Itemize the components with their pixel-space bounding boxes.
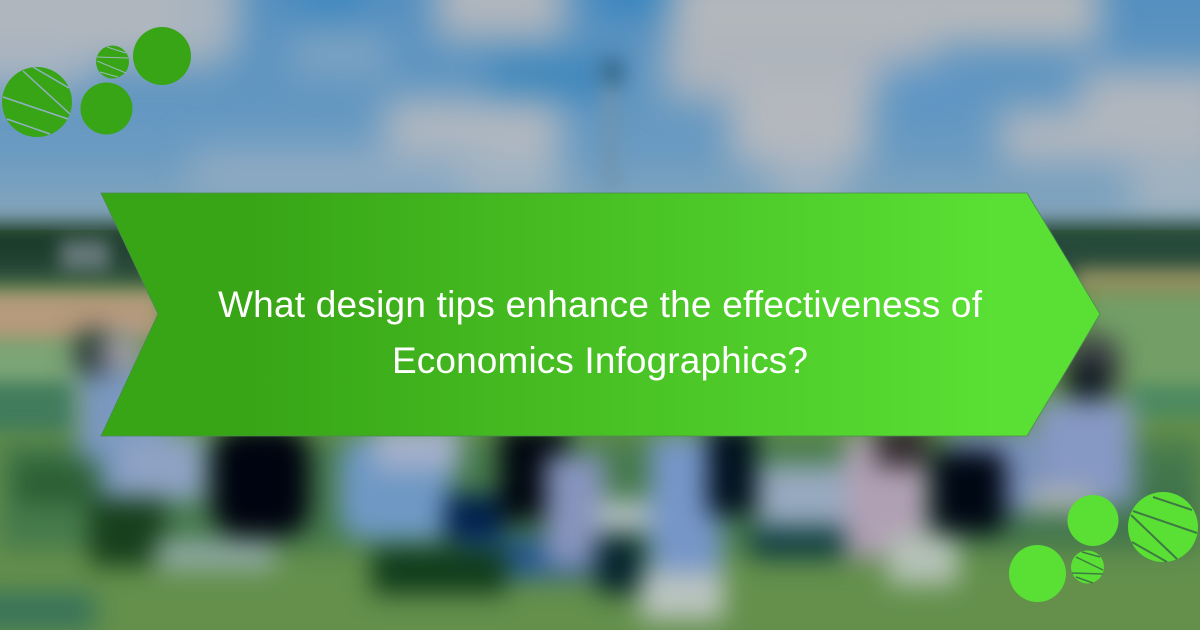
circle: small striped [1071,550,1104,584]
circle: solid upper [1068,495,1118,546]
decoration: bottom-right circle cluster [1009,492,1198,602]
circle: solid lower [80,82,132,134]
circle: solid upper [133,27,191,85]
circle: large striped [2,67,72,137]
circle: small striped [96,46,129,78]
circle: solid lower [1009,545,1066,602]
heading [218,284,983,381]
heading: Economics Infographics? [392,340,808,381]
circle: large striped [1128,492,1198,562]
heading: What design tips enhance the effectiveness of [218,284,983,325]
decoration: top-left circle cluster [2,27,191,137]
banner: green arrow ribbon [101,193,1100,436]
